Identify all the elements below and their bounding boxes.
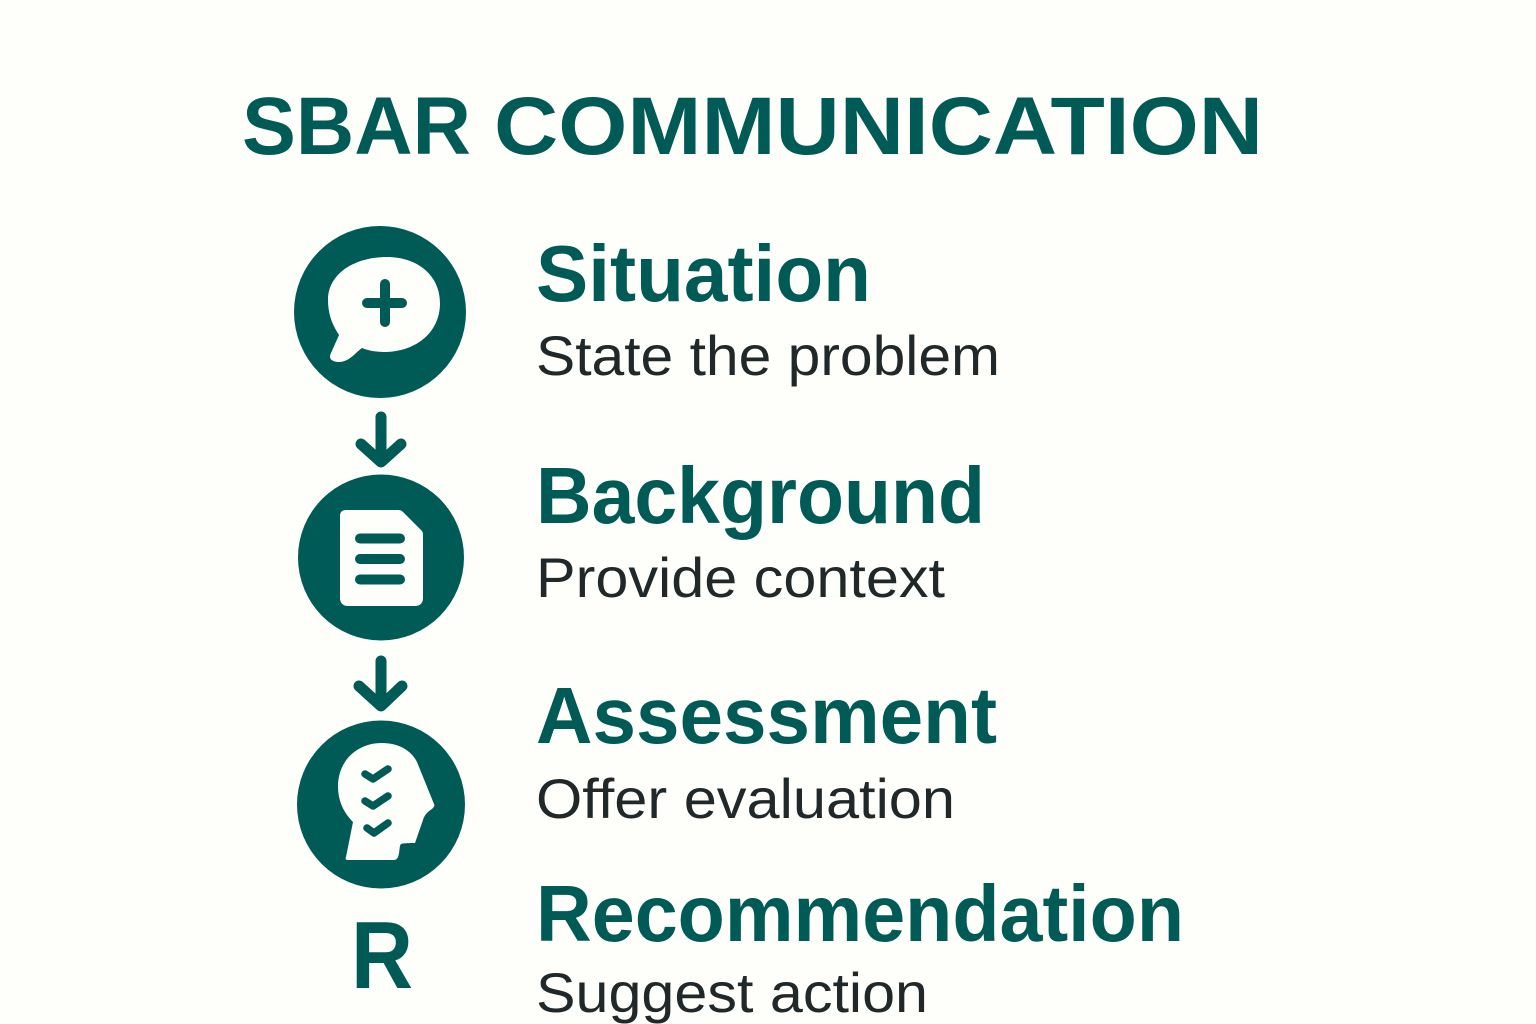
arrow: situation to background [361, 417, 401, 462]
step: situation: Situation [536, 229, 871, 318]
icon: head with checklist [297, 720, 465, 888]
title: SBAR [242, 81, 471, 172]
step: recommendation: Suggest action [536, 961, 928, 1024]
step: situation [536, 229, 1000, 387]
title: COMMUNICATION [494, 81, 1263, 172]
step: recommendation [536, 869, 1184, 1024]
step: situation: State the problem [536, 324, 1000, 387]
step: background: Provide context [536, 546, 945, 609]
icon: speech bubble with plus [294, 226, 466, 398]
step: assessment: Assessment [536, 671, 997, 760]
step: recommendation: Recommendation [536, 869, 1184, 958]
title [242, 81, 1263, 172]
letter R: R [351, 902, 413, 1009]
arrow: background to assessment [359, 661, 402, 706]
step: assessment: Offer evaluation [536, 767, 955, 830]
step: background: Background [536, 451, 985, 540]
step: background [536, 451, 985, 609]
step: assessment [536, 671, 997, 830]
icon: document [298, 474, 464, 640]
